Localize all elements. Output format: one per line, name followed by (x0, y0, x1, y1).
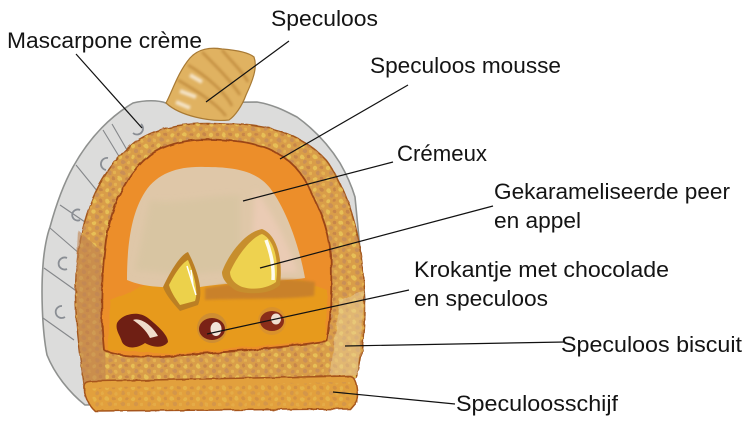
caramelised pear and apple pieces (163, 229, 281, 311)
cream dots (56, 124, 143, 318)
label: Crémeux: Crémeux (397, 141, 488, 166)
speculoos biscuit shell (76, 123, 365, 390)
crémeux (127, 167, 305, 287)
label: Gekarameliseerde peer en appel: en appel (494, 208, 581, 233)
label: Speculoos mousse: Speculoos mousse (370, 53, 561, 78)
label: Krokantje met chocolade en speculoos: en speculoos (414, 286, 548, 311)
label: Mascarpone crème: Mascarpone crème (7, 28, 202, 53)
label: Gekarameliseerde peer en appel: Gekarameliseerde peer (494, 179, 731, 204)
label: Speculoos: Speculoos (271, 6, 378, 31)
label: Speculoosschijf: Speculoosschijf (456, 391, 619, 416)
chocolate crunch pieces (117, 307, 286, 347)
speculoos mousse (102, 139, 331, 357)
label: Krokantje met chocolade en speculoos: Krokantje met chocolade (414, 257, 669, 282)
large apple piece (222, 229, 281, 293)
small pear piece (163, 252, 200, 311)
label: Speculoos biscuit: Speculoos biscuit (561, 332, 743, 357)
speculoos disc base (84, 376, 358, 411)
leader lines (76, 41, 565, 404)
illustration: layered speculoos dessert (42, 48, 365, 411)
speculoos cookie on top (166, 48, 255, 120)
mascarpone crème outer layer (42, 101, 365, 405)
